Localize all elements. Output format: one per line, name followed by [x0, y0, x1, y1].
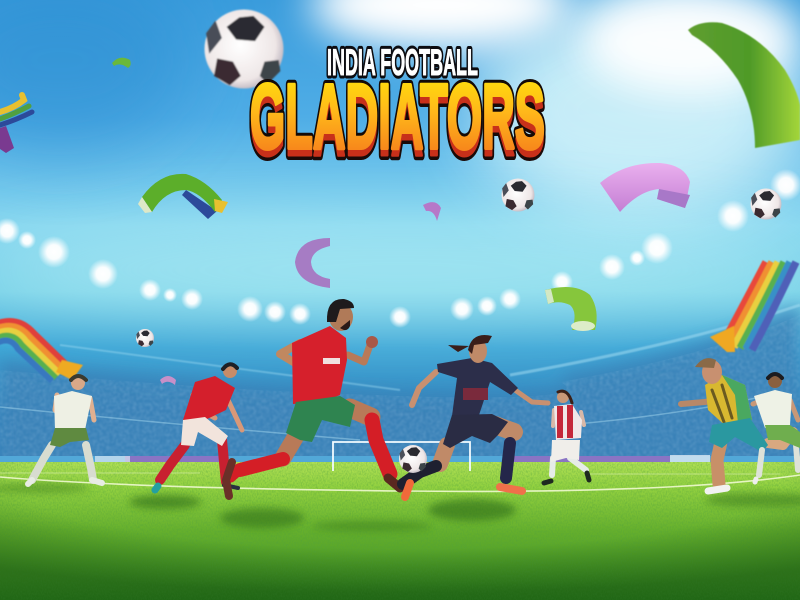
player: green and yellow kit [681, 358, 793, 491]
ribbon: small green top [112, 58, 131, 68]
player: striped kit [544, 391, 589, 483]
football: far right [750, 188, 782, 220]
ribbon: small pink curl [423, 202, 441, 221]
title line: INDIA FOOTBALL [327, 42, 478, 83]
ribbon: rainbow right [710, 262, 796, 352]
title: INDIA FOOTBALL [327, 42, 478, 83]
stadium crowd stands [0, 305, 800, 470]
ribbon: rainbow top-left [0, 95, 32, 153]
ribbon: green top-right [688, 22, 800, 148]
floodlights [0, 169, 800, 328]
player: right white kit [753, 374, 800, 482]
ribbon: rainbow lower-left [0, 321, 83, 381]
ribbon: green tube [545, 287, 597, 331]
football: small left [136, 329, 154, 347]
player: left white kit [28, 376, 102, 484]
football: top-left large [204, 10, 284, 89]
player: main red and green kit [226, 299, 400, 496]
ribbon: pink arc [600, 163, 690, 212]
goal frame [333, 442, 470, 471]
ribbon: green-rainbow arc [138, 174, 228, 219]
background: stadium sky [0, 0, 800, 470]
pitch [0, 462, 800, 600]
title: INDIA FOOTBALL [327, 42, 478, 83]
football: mid right [502, 178, 534, 212]
advertising boards [0, 455, 800, 465]
player: red kit left [155, 364, 242, 490]
title [250, 42, 545, 175]
ribbon: tiny pink [160, 376, 176, 385]
football: at feet [399, 445, 427, 473]
title line: GLADIATORS [250, 66, 545, 175]
ribbon: purple C [295, 238, 330, 288]
player: dark blue kit [403, 335, 548, 497]
